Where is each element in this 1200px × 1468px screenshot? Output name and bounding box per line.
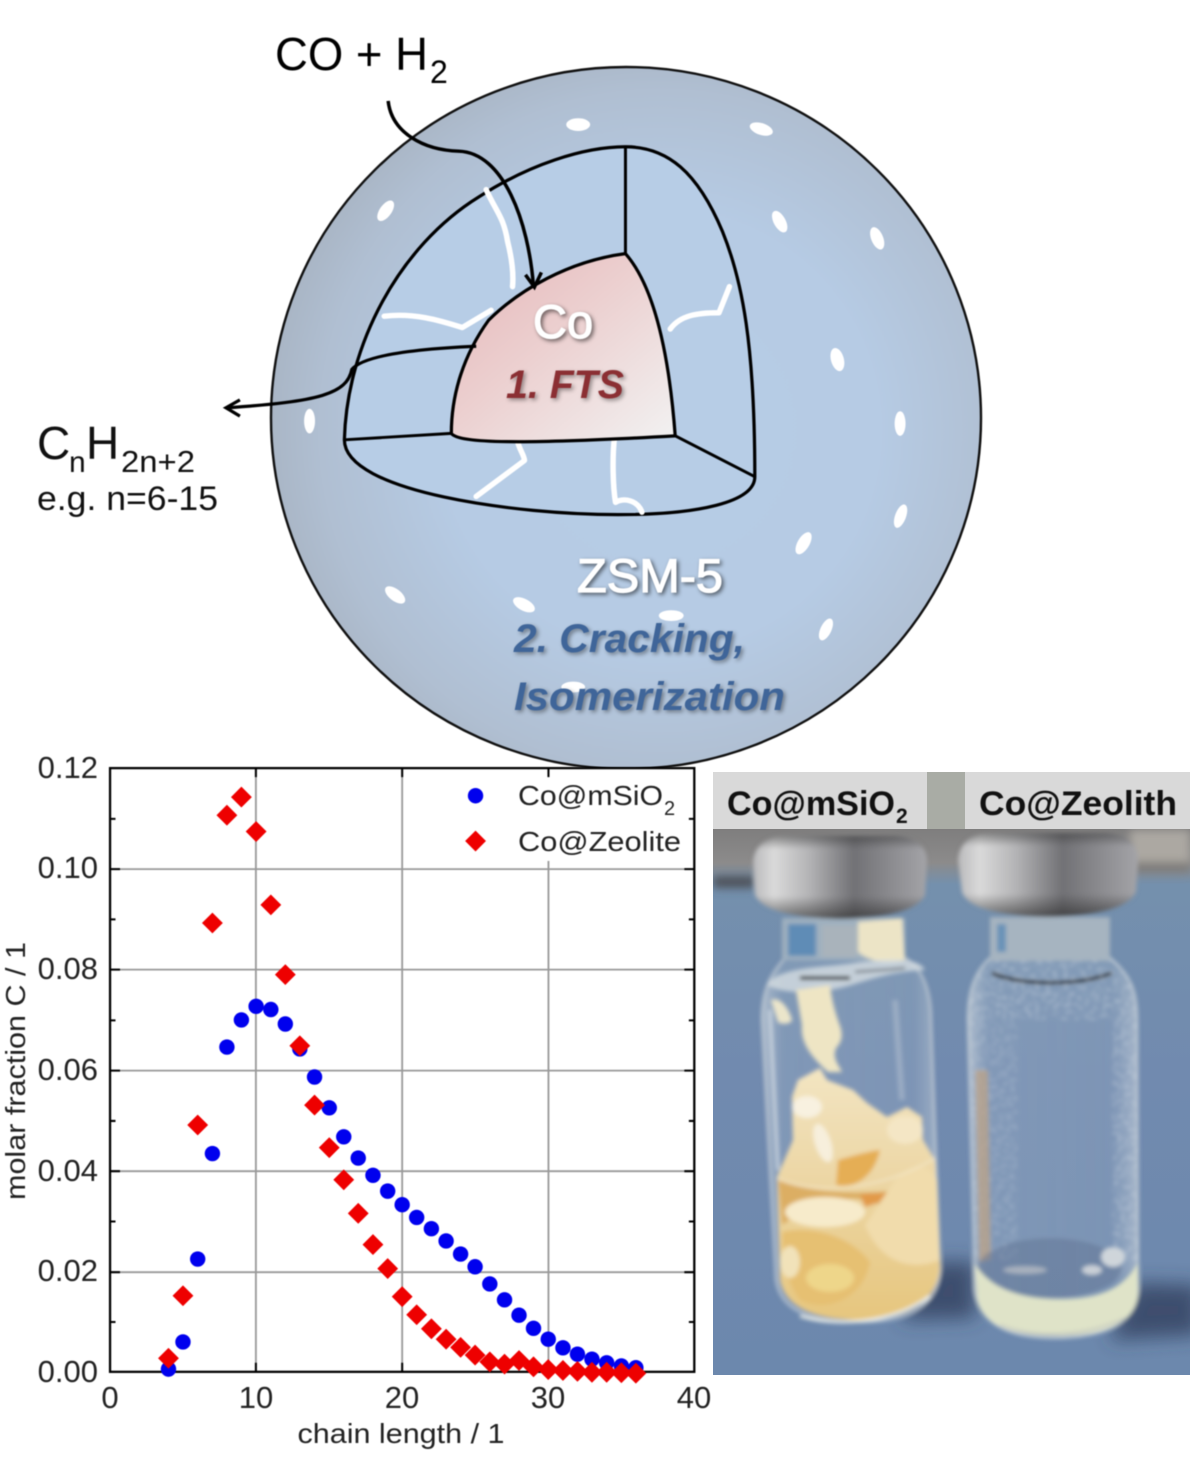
y axis tick labels: 0.10	[38, 850, 98, 885]
left vial glass body	[762, 958, 940, 1322]
sphere: ZSM-5 shell	[271, 67, 981, 769]
gap between labels	[927, 772, 965, 829]
left vial cap	[753, 836, 927, 919]
arrow: product leaving capsule	[226, 346, 476, 416]
legend marker: diamond	[465, 831, 486, 851]
condensation speckle	[968, 960, 1138, 1260]
glass wall glints	[770, 1010, 778, 1170]
left vial neck	[782, 918, 905, 960]
photo background	[713, 772, 1190, 1375]
x axis tick labels	[101, 1380, 711, 1415]
pale lumps	[792, 1096, 822, 1118]
y axis tick labels: 0.02	[38, 1253, 98, 1288]
y axis title: molar fraction C / 1	[0, 942, 31, 1200]
wax main mass	[777, 1068, 940, 1320]
x axis tick labels: 40	[677, 1380, 711, 1415]
label bar: right	[965, 772, 1190, 829]
label: CO + H2: 2	[430, 54, 448, 90]
y axis tick labels: 0.00	[38, 1354, 98, 1389]
plot background	[110, 768, 694, 1372]
right vial glass body	[968, 958, 1138, 1338]
label: CnH2n+2: C	[37, 417, 70, 469]
cobalt core	[451, 254, 675, 442]
x axis tick labels: 20	[385, 1380, 419, 1415]
shadowed base interior	[978, 1238, 1122, 1298]
backdrop blur bands	[713, 830, 1190, 888]
label: CnH2n+2: H	[86, 417, 119, 469]
x axis title: chain length / 1	[298, 1418, 504, 1449]
label: CnH2n+2	[37, 417, 195, 479]
vial label: Co@mSiO2: Co@mSiO	[727, 785, 895, 823]
series: Co@Zeolite	[158, 787, 646, 1384]
label: CnH2n+2: 2n+2	[121, 444, 195, 479]
y axis tick labels: 0.06	[38, 1052, 98, 1087]
chart: molar fraction vs chain length	[0, 750, 711, 1450]
plot frame	[110, 768, 694, 1372]
arrow: syngas entering capsule	[388, 101, 541, 287]
y axis tick labels: 0.04	[38, 1153, 98, 1188]
label: CnH2n+2: n	[69, 446, 86, 479]
wax upper streak	[796, 985, 842, 1072]
y axis tick labels	[38, 750, 98, 1389]
label: CO + H2: CO + H	[275, 28, 428, 80]
legend text: Co@Zeolite: Co@Zeolite	[518, 826, 681, 857]
vial label: Co@Zeolith: Co@Zeolith	[979, 785, 1177, 823]
pale liquid	[975, 1262, 1138, 1336]
glass bottom highlight	[777, 1158, 935, 1188]
x axis tick labels: 0	[101, 1380, 119, 1415]
legend text: Co@mSiO2: Co@mSiO	[518, 780, 663, 811]
axis ticks	[110, 768, 694, 1372]
panel: capsule catalyst schematic	[37, 28, 983, 768]
legend marker: circle	[468, 788, 483, 803]
right vial	[968, 917, 1138, 1338]
label: ZSM-5: ZSM-5	[577, 549, 723, 602]
white channels	[384, 190, 729, 512]
speck clusters near liquid	[1101, 1247, 1125, 1267]
label: 2. Cracking,: 2. Cracking,	[513, 617, 745, 661]
vial label: Co@mSiO2: 2	[896, 805, 908, 828]
x axis tick labels: 30	[531, 1380, 565, 1415]
legend text: Co@mSiO2: 2	[664, 798, 675, 820]
legend text: Co@mSiO2	[518, 780, 675, 820]
vial shadows	[900, 1262, 1200, 1340]
label: Co: Co	[533, 295, 593, 348]
x axis tick labels: 10	[239, 1380, 273, 1415]
label: e.g. n=6-15: e.g. n=6-15	[37, 480, 218, 518]
y axis tick labels: 0.12	[38, 750, 98, 785]
right vial cap	[958, 833, 1138, 917]
left vial	[762, 918, 940, 1322]
panel: photo of two vials	[713, 772, 1190, 1375]
grid lines	[110, 768, 694, 1372]
residue on glass	[975, 1070, 991, 1262]
cut-away wedge	[344, 147, 755, 515]
wedge edges	[344, 147, 755, 477]
right vial neck	[990, 917, 1110, 961]
legend background	[457, 772, 688, 861]
series: Co@mSiO2	[161, 999, 644, 1377]
label: 1. FTS: 1. FTS	[506, 363, 624, 407]
pores on shell	[304, 118, 910, 692]
y axis tick labels: 0.08	[38, 951, 98, 986]
amber layer	[778, 1180, 900, 1225]
label: Isomerization: Isomerization	[514, 675, 785, 719]
label bar: left	[713, 772, 927, 829]
drawing in zoom coordinates	[226, 101, 910, 692]
